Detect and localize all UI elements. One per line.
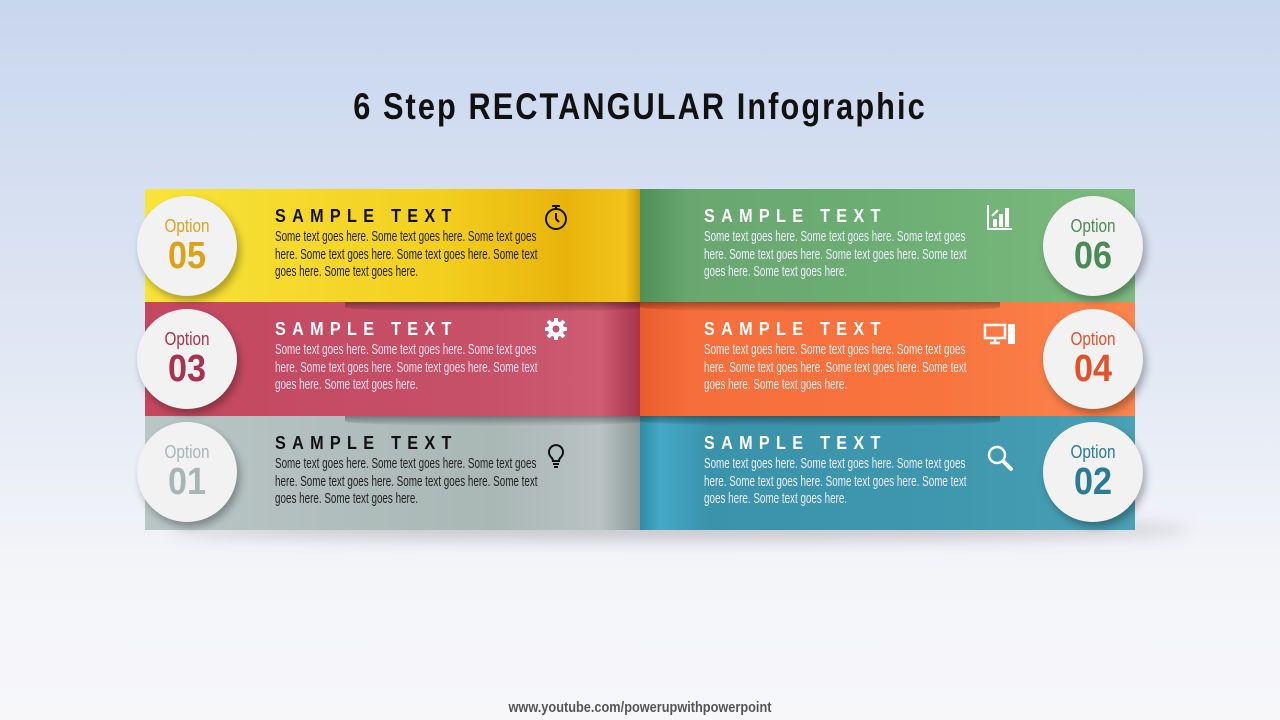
title: 6 Step RECTANGULAR Infographic bbox=[353, 86, 927, 127]
text 03 bbox=[275, 342, 538, 393]
text 03: goes here. Some text goes here. bbox=[275, 377, 418, 393]
circle: option 05: Option bbox=[164, 216, 210, 236]
text 02 bbox=[704, 456, 967, 507]
panel: 01 bbox=[145, 416, 640, 530]
text 02: goes here. Some text goes here. bbox=[704, 491, 847, 507]
circle: option 03 bbox=[137, 309, 237, 409]
circle: option 04: 04 bbox=[1074, 348, 1112, 390]
heading 02: SAMPLE TEXT bbox=[704, 433, 887, 453]
circle: option 06 bbox=[1043, 196, 1143, 296]
circle: option 06: 06 bbox=[1074, 235, 1112, 277]
heading 01: SAMPLE TEXT bbox=[275, 433, 458, 453]
text 05: Some text goes here. Some text goes here. Some text goes bbox=[275, 229, 536, 245]
circle: option 05 bbox=[137, 196, 237, 296]
icon: chart bbox=[987, 205, 1012, 230]
text 05 bbox=[275, 229, 538, 280]
text 03: Some text goes here. Some text goes here. Some text goes bbox=[275, 342, 536, 358]
icon: computer bbox=[984, 324, 1015, 344]
circle: option 04: Option bbox=[1070, 329, 1116, 349]
text 03: here. Some text goes here. Some text goes here. Some text bbox=[275, 360, 538, 376]
panel: 02 bbox=[640, 416, 1135, 530]
panel: 06 bbox=[640, 189, 1135, 303]
circle: option 01: Option bbox=[164, 442, 210, 462]
panel: 05 bbox=[145, 189, 640, 303]
circle: option 02: 02 bbox=[1074, 461, 1112, 503]
text 05: goes here. Some text goes here. bbox=[275, 264, 418, 280]
circle: option 01 bbox=[137, 422, 237, 522]
icon: magnifier bbox=[988, 446, 1014, 472]
icon: bulb bbox=[548, 444, 564, 468]
text 01: here. Some text goes here. Some text goes here. Some text bbox=[275, 474, 538, 490]
circle: option 04 bbox=[1043, 309, 1143, 409]
shadow under board bbox=[170, 520, 1190, 540]
icon: gear bbox=[545, 318, 567, 340]
text 04: here. Some text goes here. Some text goes here. Some text bbox=[704, 360, 967, 376]
heading 05: SAMPLE TEXT bbox=[275, 206, 458, 226]
circle: option 03: 03 bbox=[168, 348, 206, 390]
text 01 bbox=[275, 456, 538, 507]
text 04 bbox=[704, 342, 967, 393]
text 06: Some text goes here. Some text goes here. Some text goes bbox=[704, 229, 965, 245]
heading 06: SAMPLE TEXT bbox=[704, 206, 887, 226]
text 06: goes here. Some text goes here. bbox=[704, 264, 847, 280]
footer url: www.youtube.com/powerupwithpowerpoint bbox=[508, 699, 772, 716]
heading 04: SAMPLE TEXT bbox=[704, 319, 887, 339]
text 02: here. Some text goes here. Some text goes here. Some text bbox=[704, 474, 967, 490]
circle: option 02 bbox=[1043, 422, 1143, 522]
text 02: Some text goes here. Some text goes here. Some text goes bbox=[704, 456, 965, 472]
circle: option 01: 01 bbox=[168, 461, 206, 503]
heading 03: SAMPLE TEXT bbox=[275, 319, 458, 339]
panel: 04 bbox=[640, 302, 1135, 416]
text 05: here. Some text goes here. Some text goes here. Some text bbox=[275, 246, 538, 262]
icon: stopwatch bbox=[545, 205, 567, 230]
circle: option 03: Option bbox=[164, 329, 210, 349]
text 01: Some text goes here. Some text goes here. Some text goes bbox=[275, 456, 536, 472]
circle: option 02: Option bbox=[1070, 442, 1116, 462]
circle: option 05: 05 bbox=[168, 235, 206, 277]
text 06: here. Some text goes here. Some text goes here. Some text bbox=[704, 246, 967, 262]
panel: 03 bbox=[145, 302, 640, 416]
text 04: Some text goes here. Some text goes here. Some text goes bbox=[704, 342, 965, 358]
text 01: goes here. Some text goes here. bbox=[275, 491, 418, 507]
circle: option 06: Option bbox=[1070, 216, 1116, 236]
text 06 bbox=[704, 229, 967, 280]
text 04: goes here. Some text goes here. bbox=[704, 377, 847, 393]
